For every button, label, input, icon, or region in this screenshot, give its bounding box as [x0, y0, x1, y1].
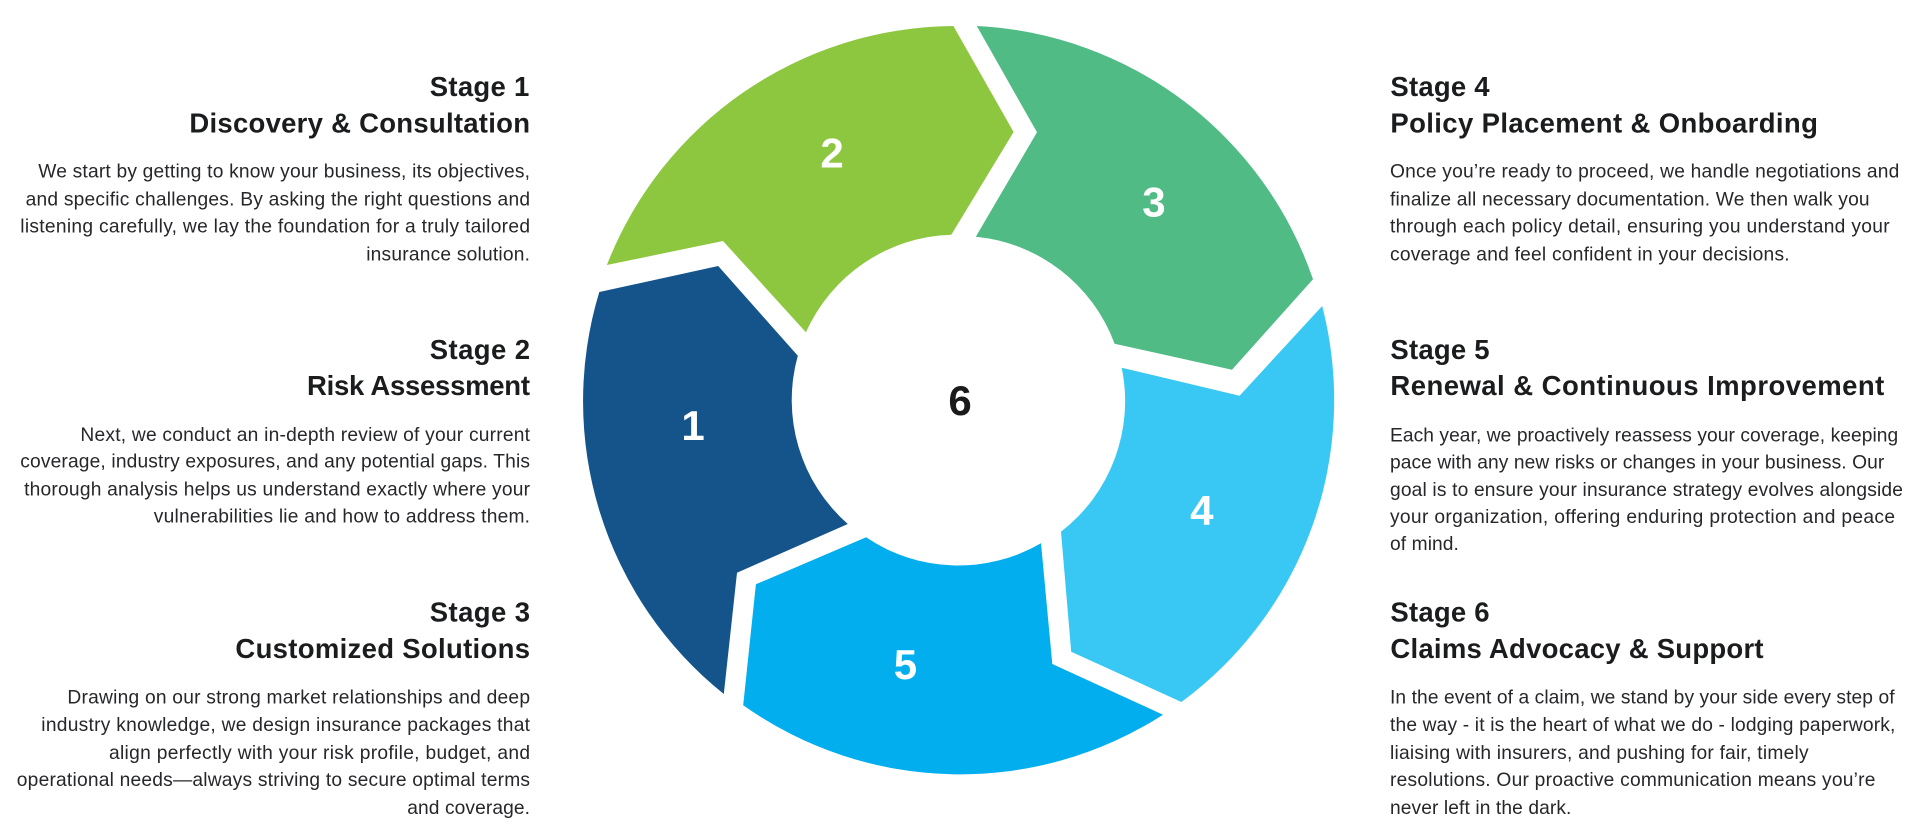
body text: Stage 5: pace with any new risks or changes in your business. Our — [1390, 453, 1885, 474]
heading: Stage 2: Stage 2 — [430, 334, 530, 365]
body text: Stage 2: vulnerabilities lie and how to address them. — [154, 507, 530, 528]
number 5: 5 — [894, 641, 917, 688]
body text: Stage 4 — [1390, 162, 1899, 266]
panel: Stage 3 text — [17, 597, 531, 819]
panel: Stage 1 text — [20, 71, 530, 266]
chart: circular six stage cycle — [583, 26, 1334, 774]
heading: Stage 6: Stage 6 — [1390, 597, 1490, 628]
body text: Stage 6: the way - it is the heart of what we do - lodging paperwork, — [1390, 715, 1895, 736]
heading: Risk Assessment: Risk Assessment — [307, 370, 530, 401]
body text: Stage 3: Drawing on our strong market relationships and deep — [67, 688, 530, 709]
segment 3: teal arrow — [976, 26, 1313, 370]
body text: Stage 2: Next, we conduct an in-depth review of your current — [80, 425, 531, 446]
heading: Discovery and Consultation: Discovery & Consultation — [189, 107, 530, 138]
panel: Stage 6 text — [1390, 597, 1895, 819]
body text: Stage 4: through each policy detail, ensuring you understand your — [1390, 217, 1890, 238]
number 1: 1 — [681, 402, 705, 449]
body text: Stage 1: insurance solution. — [366, 245, 530, 266]
segment 2: green arrow — [607, 26, 1014, 332]
segment 4: light blue arrow — [1061, 306, 1334, 702]
body text: Stage 3: align perfectly with your risk profile, budget, and — [109, 743, 530, 764]
body text: Stage 1 — [20, 162, 530, 266]
body text: Stage 6: liaising with insurers, and pushing for fair, timely — [1390, 743, 1809, 764]
body text: Stage 4: coverage and feel confident in your decisions. — [1390, 245, 1790, 266]
body text: Stage 2 — [20, 425, 531, 528]
body text: Stage 1: listening carefully, we lay the foundation for a truly tailored — [20, 217, 530, 238]
number 4: 4 — [1190, 487, 1214, 534]
body text: Stage 5 — [1390, 425, 1903, 555]
heading: Renewal and Continuous Improvement: Renewal & Continuous Improvement — [1390, 370, 1884, 401]
heading: Stage 1: Stage 1 — [430, 71, 529, 102]
heading: Customized Solutions: Customized Solutions — [235, 633, 530, 664]
segment 1: navy arrow — [583, 266, 848, 694]
body text: Stage 3: operational needs—always striving to secure optimal terms — [17, 770, 530, 791]
segment 5: blue arrow — [743, 537, 1163, 774]
body text: Stage 3: industry knowledge, we design insurance packages that — [41, 715, 531, 736]
heading: Claims Advocacy and Support: Claims Advocacy & Support — [1390, 633, 1764, 664]
body text: Stage 6: In the event of a claim, we stand by your side every step of — [1390, 688, 1895, 709]
body text: Stage 5: your organization, offering enduring protection and peace — [1390, 507, 1895, 528]
body text: Stage 6 — [1390, 688, 1895, 819]
body text: Stage 4: finalize all necessary documentation. We then walk you — [1390, 190, 1870, 211]
number 3: 3 — [1142, 179, 1166, 226]
body text: Stage 6: resolutions. Our proactive communication means you’re — [1390, 770, 1875, 791]
body text: Stage 5: of mind. — [1390, 534, 1459, 555]
body text: Stage 1: We start by getting to know your business, its objectives, — [38, 162, 530, 183]
body text: Stage 4: Once you’re ready to proceed, we handle negotiations and — [1390, 162, 1899, 183]
heading: Policy Placement and Onboarding: Policy Placement & Onboarding — [1390, 107, 1818, 138]
heading: Stage 3: Stage 3 — [430, 597, 530, 628]
panel: Stage 4 text — [1390, 71, 1899, 266]
body text: Stage 5: goal is to ensure your insurance strategy evolves alongside — [1390, 480, 1903, 501]
body text: Stage 6: never left in the dark. — [1390, 798, 1571, 819]
heading: Stage 4: Stage 4 — [1390, 71, 1490, 102]
number 2: 2 — [820, 129, 844, 176]
body text: Stage 3 — [17, 688, 531, 819]
body text: Stage 5: Each year, we proactively reassess your coverage, keeping — [1390, 425, 1898, 446]
heading: Stage 5: Stage 5 — [1390, 334, 1490, 365]
panel: Stage 5 text — [1390, 334, 1903, 555]
number 6: center: 6 — [948, 377, 972, 424]
panel: Stage 2 text — [20, 334, 531, 528]
body text: Stage 3: and coverage. — [407, 798, 530, 819]
body text: Stage 2: thorough analysis helps us understand exactly where your — [24, 480, 531, 501]
body text: Stage 2: coverage, industry exposures, and any potential gaps. This — [20, 452, 530, 473]
body text: Stage 1: and specific challenges. By asking the right questions and — [26, 190, 530, 211]
